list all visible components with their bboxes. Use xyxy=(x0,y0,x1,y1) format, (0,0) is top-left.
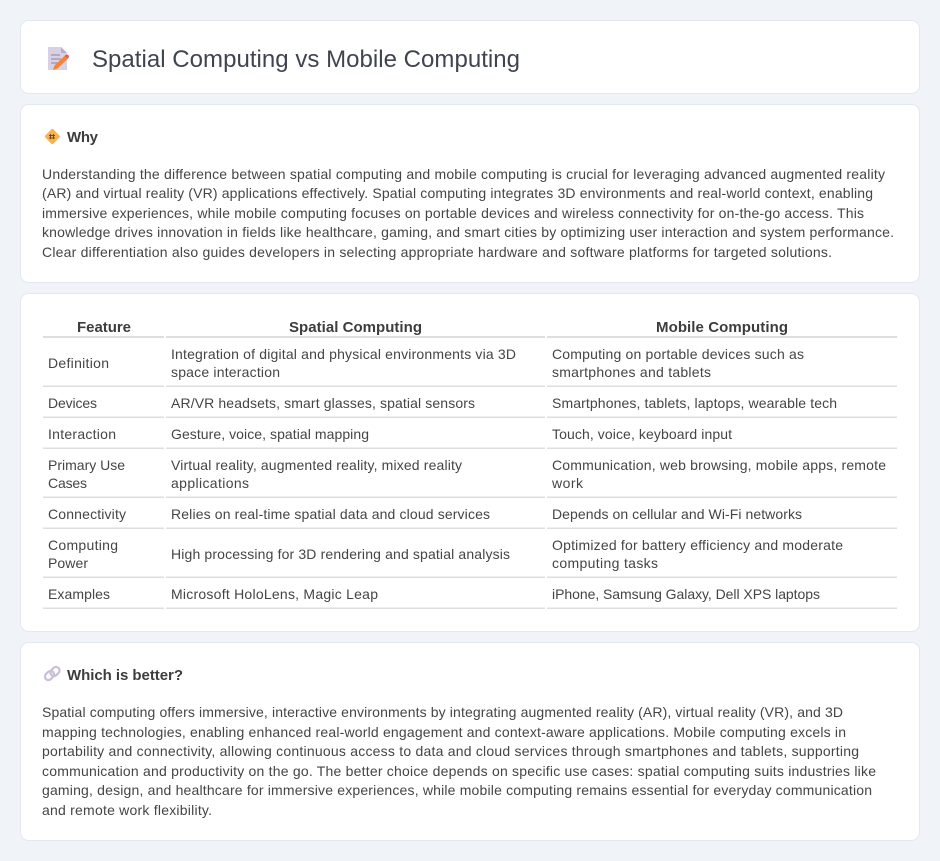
row: interaction xyxy=(43,426,897,449)
row: definition: Definition xyxy=(48,355,109,371)
text block: which is better paragraph: and remote work flexibility. xyxy=(42,802,212,818)
row: connectivity: Connectivity xyxy=(48,506,126,522)
row: definition: Integration of digital and physical environments via 3D xyxy=(171,346,516,362)
row: interaction: Gesture, voice, spatial mapping xyxy=(171,426,369,442)
row: examples: Examples xyxy=(48,586,110,602)
row: connectivity xyxy=(43,506,897,529)
row: definition: space interaction xyxy=(171,364,280,380)
text block: why paragraph: knowledge drives innovation in fields like healthcare, gaming, and smart cities by optimizing user interaction and system performance. xyxy=(42,224,894,240)
row: definition: Computing on portable devices such as xyxy=(552,346,804,362)
panel: which is better xyxy=(20,642,920,840)
row: definition xyxy=(43,346,897,387)
title: Spatial Computing vs Mobile Computing xyxy=(92,46,520,73)
panel: why xyxy=(20,104,920,282)
table header: Feature xyxy=(77,319,131,336)
row: primary use cases xyxy=(43,457,897,498)
icon: link xyxy=(43,665,61,682)
row: computing power: High processing for 3D rendering and spatial analysis xyxy=(171,546,510,562)
text block: which is better paragraph: communication and productivity on the go. The better choice depends on specific use cases: spatial computing suits industries like xyxy=(42,763,876,779)
row: devices: Devices xyxy=(48,395,97,411)
row: connectivity: Relies on real-time spatial data and cloud services xyxy=(171,506,490,522)
row: primary use cases: work xyxy=(551,475,584,491)
row: primary use cases: applications xyxy=(171,475,249,491)
heading: why: Why xyxy=(67,129,99,146)
text block: why paragraph: Understanding the difference between spatial computing and mobile computing is crucial for leveraging advanced augmented reality xyxy=(42,166,885,182)
row: primary use cases: Virtual reality, augmented reality, mixed reality xyxy=(171,457,462,473)
row: devices xyxy=(43,395,897,418)
row: devices: AR/VR headsets, smart glasses, spatial sensors xyxy=(171,395,475,411)
heading: which is better: Which is better? xyxy=(67,667,183,684)
icon: memo with pencil xyxy=(48,47,69,70)
row: computing power: Computing xyxy=(48,537,118,553)
text block: why paragraph: (AR) and virtual reality (VR) applications effectively. Spatial computing integrates 3D environments and real-world context, enabling xyxy=(42,185,873,201)
row: connectivity: Depends on cellular and Wi-Fi networks xyxy=(552,506,802,522)
row: computing power xyxy=(43,537,897,578)
text block: why paragraph: Clear differentiation also guides developers in selecting appropriate hardware and software platforms for targeted solutions. xyxy=(42,244,832,260)
row: primary use cases: Primary Use xyxy=(48,457,125,473)
row: definition: smartphones and tablets xyxy=(552,364,711,380)
table header: Mobile Computing xyxy=(656,319,788,336)
text block: why paragraph: immersive experiences, while mobile computing focuses on portable devices and wireless connectivity for on-the-go access. This xyxy=(42,205,864,221)
row: primary use cases: Cases xyxy=(48,475,87,491)
panel: comparison table xyxy=(20,294,920,632)
table header xyxy=(43,319,897,338)
row: interaction: Touch, voice, keyboard input xyxy=(552,426,732,442)
row: computing power: Optimized for battery efficiency and moderate xyxy=(552,537,843,553)
text block: which is better paragraph: portability and connectivity, allowing continuous access to data and cloud services through smartphones and tablets, supporting xyxy=(42,743,859,759)
text block: which is better paragraph: Spatial computing offers immersive, interactive environments by integrating augmented reality (AR), virtual reality (VR), and 3D xyxy=(42,704,843,720)
text block: which is better paragraph: gaming, design, and healthcare for immersive experiences, while mobile computing remains essential for everyday communication xyxy=(42,782,872,798)
row: examples xyxy=(43,586,897,609)
row: examples: Microsoft HoloLens, Magic Leap xyxy=(171,586,378,602)
row: computing power: computing tasks xyxy=(552,555,658,571)
row: computing power: Power xyxy=(48,555,88,571)
icon: diamond warning sign xyxy=(44,128,60,145)
panel: title header xyxy=(20,20,920,94)
row: primary use cases: Communication, web browsing, mobile apps, remote xyxy=(552,457,886,473)
row: interaction: Interaction xyxy=(48,426,116,442)
table header: Spatial Computing xyxy=(289,319,422,336)
row: examples: iPhone, Samsung Galaxy, Dell XPS laptops xyxy=(552,586,820,602)
text block: which is better paragraph: mapping technologies, enabling enhanced real-world engagement and context-aware applications. Mobile computing excels in xyxy=(42,724,846,740)
text block: why paragraph xyxy=(42,166,894,260)
row: devices: Smartphones, tablets, laptops, wearable tech xyxy=(552,395,837,411)
text block: which is better paragraph xyxy=(42,704,876,818)
